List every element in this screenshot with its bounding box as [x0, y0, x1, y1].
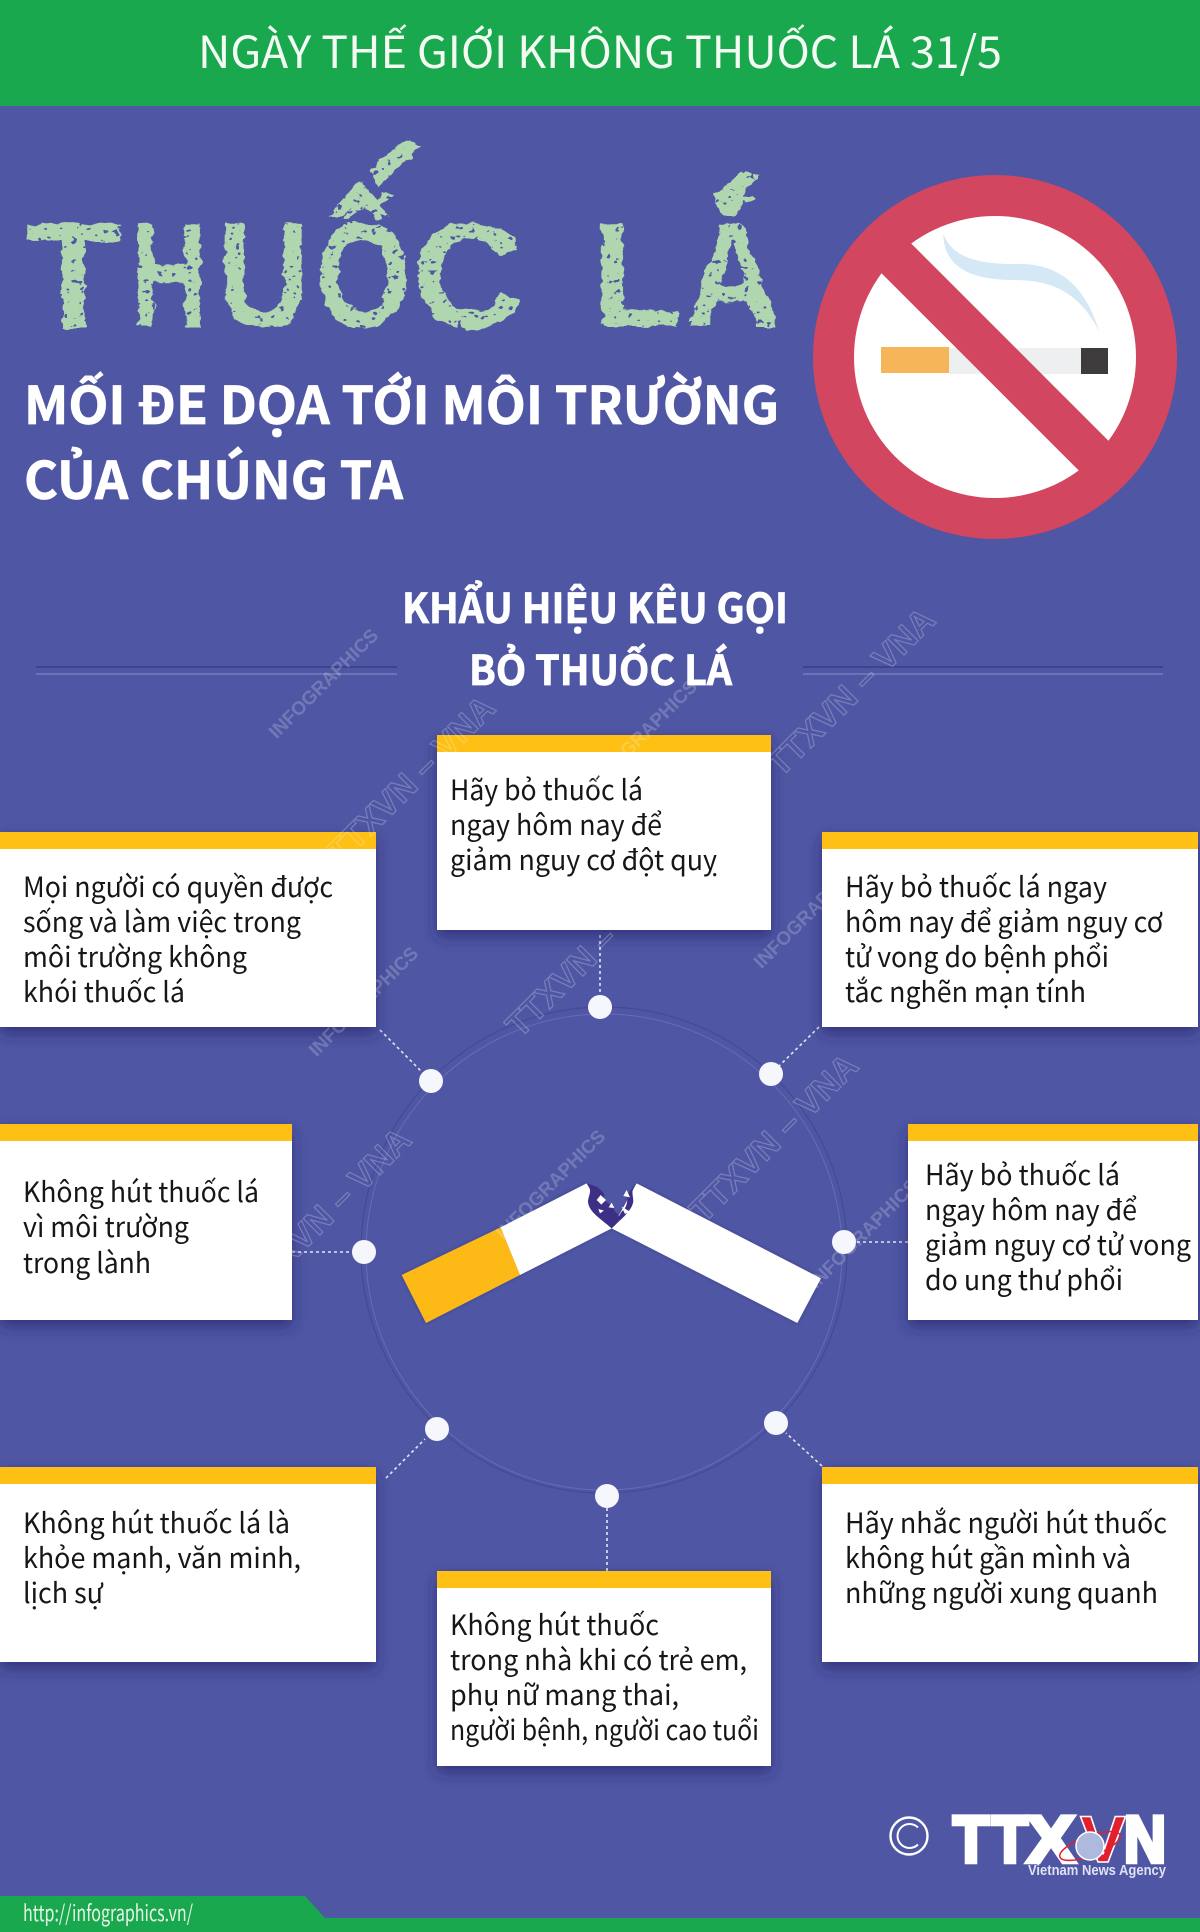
logo: copyright and TTXVN: [890, 1802, 1166, 1879]
watermarks: INFOGRAPHICS: [750, 855, 868, 973]
main title: rough lettering: U: [218, 191, 310, 359]
card: top left: sống và làm việc trong: [23, 901, 301, 941]
card: middle right: [908, 1124, 1198, 1320]
main title: rough lettering: Á: [686, 191, 780, 359]
logo: copyright and TTXVN: V: [1080, 1802, 1126, 1876]
watermarks: INFOGRAPHICS: [584, 676, 702, 794]
main title: rough lettering: T: [25, 191, 122, 359]
logo: copyright and TTXVN: Vietnam News Agency: [1028, 1863, 1166, 1879]
card: bottom right: Hãy nhắc người hút thuốc: [845, 1502, 1167, 1542]
icon: copyright: [890, 1818, 928, 1854]
section heading: [402, 575, 788, 697]
watermarks: INFOGRAPHICS: [805, 1175, 923, 1293]
card: bottom left: [0, 1467, 376, 1662]
card: bottom right: [822, 1467, 1198, 1662]
card: top right: tử vong do bệnh phổi: [845, 936, 1109, 976]
card: bottom: Không hút thuốc: [450, 1604, 659, 1644]
card: middle right: Hãy bỏ thuốc lá: [925, 1154, 1120, 1194]
card: middle left: trong lành: [23, 1242, 151, 1282]
watermarks: TTXVN – VNA: [236, 1121, 419, 1304]
card: top: [437, 735, 771, 930]
card: top: giảm nguy cơ đột quỵ: [450, 839, 717, 879]
connectors: [292, 935, 908, 1571]
watermarks: TTXVN – VNA: [760, 601, 943, 784]
card: top left: môi trường không: [23, 936, 247, 976]
watermarks: INFOGRAPHICS: [492, 1126, 610, 1244]
card: middle left: Không hút thuốc lá: [23, 1171, 259, 1211]
subtitle: [24, 364, 779, 514]
logo: copyright and TTXVN: T: [953, 1802, 989, 1876]
watermarks: [236, 601, 943, 1304]
card: bottom right: những người xung quanh: [845, 1572, 1158, 1612]
subtitle: MỐI ĐE DỌA TỚI MÔI TRƯỜNG: [24, 364, 779, 439]
card: bottom left: khỏe mạnh, văn minh,: [23, 1537, 301, 1577]
logo: copyright and TTXVN: X: [1027, 1802, 1075, 1876]
header title: NGÀY THẾ GIỚI KHÔNG THUỐC LÁ 31/5: [198, 17, 1002, 81]
watermarks: TTXVN – VNA: [499, 862, 682, 1045]
main title: rough lettering: [25, 142, 780, 359]
section heading: KHẨU HIỆU KÊU GỌI: [402, 575, 788, 635]
main title: rough lettering: C: [412, 191, 524, 359]
ring: [361, 1007, 847, 1493]
card: middle left: [0, 1124, 292, 1320]
card: top right: [822, 832, 1198, 1027]
main title: rough lettering: H: [131, 191, 207, 359]
footer url: http://infographics.vn/: [23, 1896, 193, 1928]
card: top right: Hãy bỏ thuốc lá ngay: [845, 866, 1107, 906]
card: top left: Mọi người có quyền được: [23, 866, 333, 906]
card: top left: khói thuốc lá: [23, 971, 185, 1011]
card: bottom right: không hút gần mình và: [845, 1537, 1131, 1577]
card: middle right: ngay hôm nay để: [925, 1189, 1137, 1229]
card: top: ngay hôm nay để: [450, 804, 662, 844]
icon: no smoking sign: [813, 175, 1177, 539]
icon: broken cigarette: [402, 1183, 821, 1323]
card: bottom: người bệnh, người cao tuổi: [450, 1709, 759, 1749]
card: bottom: [437, 1571, 771, 1766]
logo: copyright and TTXVN: N: [1124, 1802, 1166, 1876]
card: middle right: giảm nguy cơ tử vong: [925, 1224, 1191, 1264]
icon: smoke: [943, 233, 1099, 332]
subtitle: CỦA CHÚNG TA: [24, 439, 404, 514]
card: top: Hãy bỏ thuốc lá: [450, 769, 643, 809]
card: middle left: vì môi trường: [23, 1206, 189, 1246]
watermarks: INFOGRAPHICS: [305, 943, 423, 1061]
card: top right: tắc nghẽn mạn tính: [845, 971, 1086, 1011]
card: bottom: trong nhà khi có trẻ em,: [450, 1639, 747, 1679]
main title: rough lettering: Ố: [315, 191, 411, 359]
dots: [352, 995, 856, 1508]
main title: rough lettering: L: [592, 191, 682, 359]
header band: [0, 0, 1200, 106]
card: middle right: do ung thư phổi: [925, 1259, 1123, 1299]
logo: copyright and TTXVN: T: [992, 1802, 1028, 1876]
watermarks: TTXVN – VNA: [320, 689, 503, 872]
card: bottom left: Không hút thuốc lá là: [23, 1502, 290, 1542]
card: top left: [0, 832, 376, 1027]
card: bottom: phụ nữ mang thai,: [450, 1674, 679, 1714]
watermarks: INFOGRAPHICS: [265, 625, 383, 743]
card: top right: hôm nay để giảm nguy cơ: [845, 901, 1163, 941]
section heading: BỎ THUỐC LÁ: [469, 637, 733, 697]
watermarks: TTXVN – VNA: [683, 1047, 866, 1230]
icon: globe: [1057, 1826, 1123, 1866]
footer band: [0, 1896, 1200, 1932]
card: bottom left: lịch sự: [23, 1572, 104, 1612]
icon: cigarette: [881, 347, 1108, 374]
